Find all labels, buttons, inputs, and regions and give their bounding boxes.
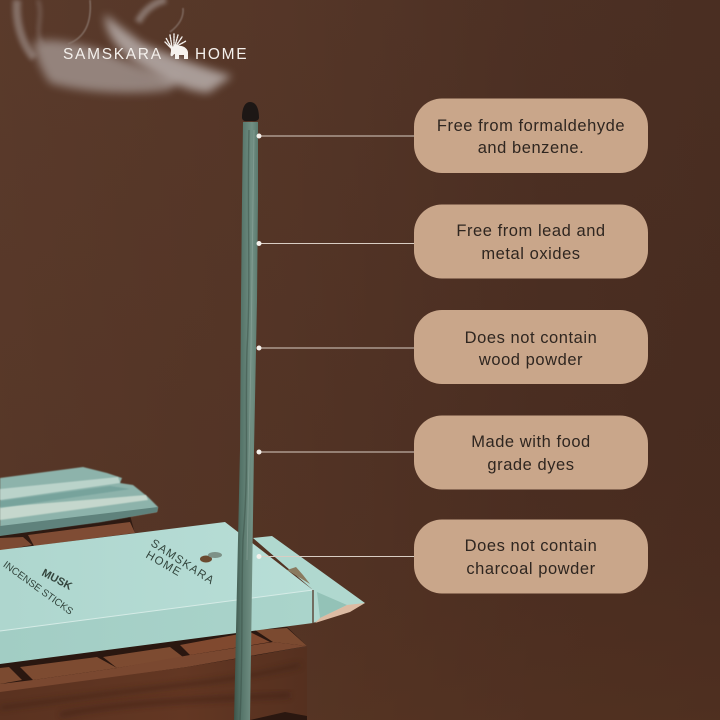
crate front face [0, 647, 307, 720]
box label: Incense sticks: INCENSE STICKS [1, 560, 75, 618]
callout: formaldehyde and benzene: and benzene. [478, 139, 584, 157]
box label: Musk: MUSK [40, 567, 74, 593]
logo wordmark right: HOME [195, 46, 248, 63]
callout: lead and metal oxides: Free from lead and [456, 222, 606, 240]
callout: lead and metal oxides [414, 204, 648, 278]
callout: wood powder: wood powder [478, 351, 583, 369]
callout: wood powder [414, 310, 648, 384]
callout: charcoal powder [414, 520, 648, 594]
callout connector lines [256, 134, 415, 559]
callout: food grade dyes [414, 416, 648, 490]
wooden crate [0, 627, 307, 720]
incense stick bundle [0, 467, 158, 536]
box label: Samskara Home: SAMSKARA [148, 537, 217, 588]
box label: Samskara Home: HOME [144, 549, 184, 579]
box front face [0, 590, 313, 664]
callout: charcoal powder: Does not contain [465, 537, 597, 555]
callout: formaldehyde and benzene: Free from formaldehyde [437, 117, 625, 135]
icon: tree and elephant [165, 34, 188, 59]
callout: food grade dyes: Made with food [471, 433, 591, 451]
incense stick [234, 102, 259, 720]
box top face [0, 522, 313, 631]
upper crate behind bundle [0, 515, 135, 556]
callout: wood powder: Does not contain [465, 329, 597, 347]
callout: food grade dyes: grade dyes [487, 456, 575, 474]
box flap [253, 536, 365, 623]
crate top slats [0, 627, 307, 694]
callout: charcoal powder: charcoal powder [466, 560, 596, 578]
smoke wisps [17, 0, 232, 93]
stick burnt tip [242, 102, 259, 121]
logo wordmark left: SAMSKARA [63, 46, 163, 63]
logo: Samskara Home [63, 34, 248, 63]
incense box: Musk [0, 522, 365, 664]
callout: formaldehyde and benzene [414, 98, 648, 173]
box printed logo [200, 552, 222, 562]
callout: lead and metal oxides: metal oxides [481, 245, 581, 263]
